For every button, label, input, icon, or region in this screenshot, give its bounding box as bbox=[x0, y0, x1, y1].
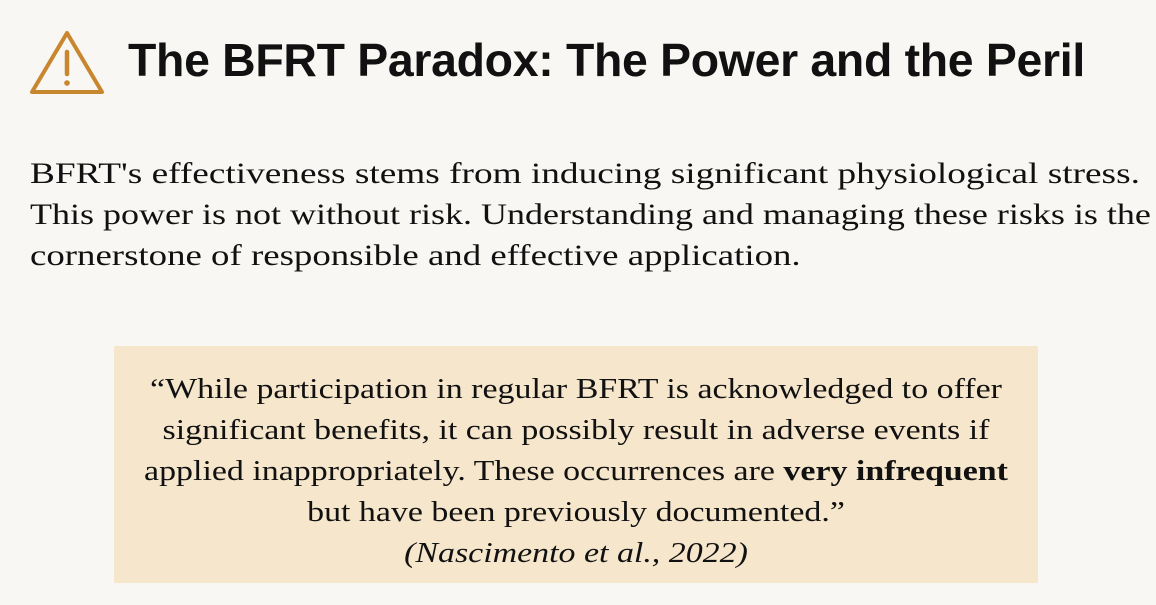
title: The BFRT Paradox: The Power and the Peril bbox=[128, 34, 1085, 86]
callout: quote: significant benefits, it can possibly result in adverse events if bbox=[163, 415, 989, 446]
callout: quote bbox=[114, 346, 1038, 583]
icon: warning triangle bbox=[30, 30, 104, 94]
intro text bbox=[30, 157, 1151, 272]
callout: quote: (Nascimento et al., 2022) bbox=[404, 538, 748, 569]
callout: quote: applied inappropriately. These occurrences are very infrequent bbox=[144, 456, 1008, 487]
callout: quote: “While participation in regular BFRT is acknowledged to offer bbox=[150, 374, 1002, 405]
intro text: This power is not without risk. Understanding and managing these risks is the bbox=[30, 198, 1151, 231]
intro text: cornerstone of responsible and effective application. bbox=[30, 239, 801, 272]
intro text: BFRT's effectiveness stems from inducing significant physiological stress. bbox=[30, 157, 1140, 190]
callout: quote: but have been previously documented.” bbox=[307, 497, 845, 528]
